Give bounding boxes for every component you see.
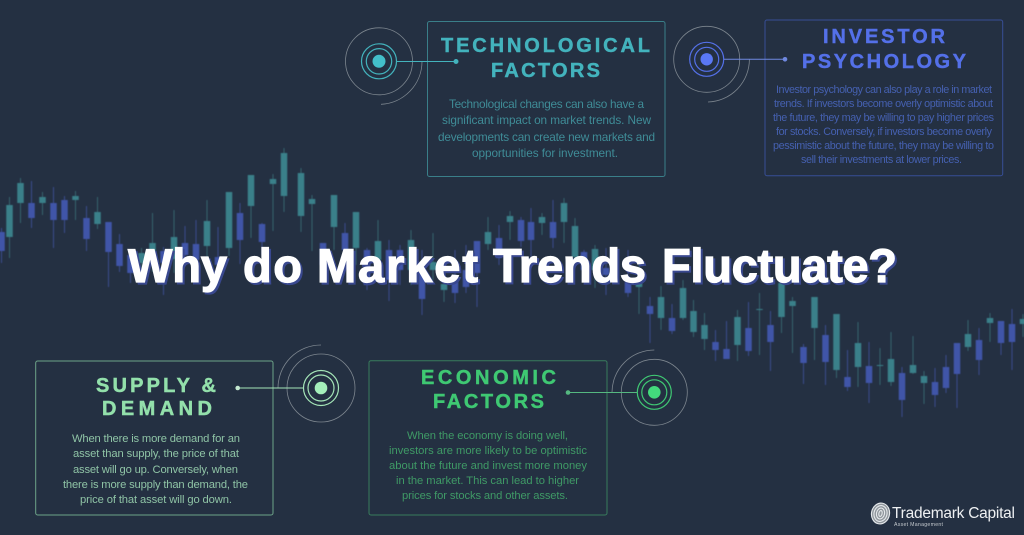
panel box [428, 22, 665, 176]
logo [870, 501, 1015, 528]
panel box [36, 361, 273, 515]
heading: SUPPLY & [96, 375, 216, 397]
icon: supply target [235, 345, 355, 422]
body text [389, 430, 587, 502]
icon: technological target [346, 28, 458, 104]
body text: for stocks. Conversely, if investors become overly [776, 126, 993, 138]
title: Fluctuate? [662, 239, 897, 292]
heading [96, 375, 216, 420]
body text: in the market. This can lead to higher [396, 475, 579, 487]
body text: prices for stocks and other assets. [402, 490, 568, 502]
title: do [243, 239, 302, 292]
title: Trends [493, 239, 646, 292]
body text: developments can create new markets and [438, 130, 655, 144]
body text: there is more supply than demand, the [63, 479, 248, 491]
body text: asset than supply, the price of that [73, 448, 240, 460]
title: Market [317, 239, 478, 292]
body text: price of that asset will go down. [80, 494, 232, 506]
panel box [765, 20, 1003, 176]
body text: asset will go up. Conversely, when [73, 464, 238, 476]
wordmark: Trademark Capital [892, 505, 1015, 522]
body text [438, 97, 655, 160]
body text: trends. If investors become overly optimistic about [774, 98, 993, 110]
heading: ECONOMIC [421, 367, 556, 389]
body text: sell their investments at lower prices. [801, 154, 962, 166]
panel: technological factors [428, 22, 665, 176]
body text [773, 84, 995, 166]
body text: Investor psychology can also play a role in market [776, 84, 992, 96]
panel: investor psychology [765, 20, 1003, 176]
icon: economic target [566, 350, 687, 425]
body text: Technological changes can also have a [449, 97, 644, 111]
heading [441, 35, 650, 82]
tagline: Asset Management [894, 522, 944, 528]
heading: FACTORS [491, 60, 600, 82]
body text: When there is more demand for an [72, 433, 240, 445]
body text: pessimistic about the future, they may be willing to [773, 140, 994, 152]
heading: DEMAND [102, 398, 212, 420]
icon: fingerprint [870, 501, 891, 526]
heading: INVESTOR [823, 26, 946, 48]
title: Why [128, 239, 227, 292]
heading: PSYCHOLOGY [802, 51, 967, 73]
body text: opportunities for investment. [472, 146, 618, 160]
heading: FACTORS [433, 391, 544, 413]
candlestick chart [2, 148, 1023, 417]
body text: When the economy is doing well, [407, 430, 568, 442]
body text [63, 433, 248, 506]
body text: the future, they may be willing to pay higher prices [773, 112, 995, 124]
panel: economic factors [369, 361, 607, 515]
title [128, 239, 897, 292]
heading: TECHNOLOGICAL [441, 35, 650, 57]
panel: supply and demand [36, 361, 273, 515]
body text: about the future and invest more money [389, 460, 587, 472]
heading [421, 367, 556, 413]
panel box [369, 361, 607, 515]
heading [802, 26, 967, 73]
body text: investors are more likely to be optimistic [389, 445, 587, 457]
body text: significant impact on market trends. New [442, 113, 651, 127]
icon: investor target [674, 26, 787, 102]
